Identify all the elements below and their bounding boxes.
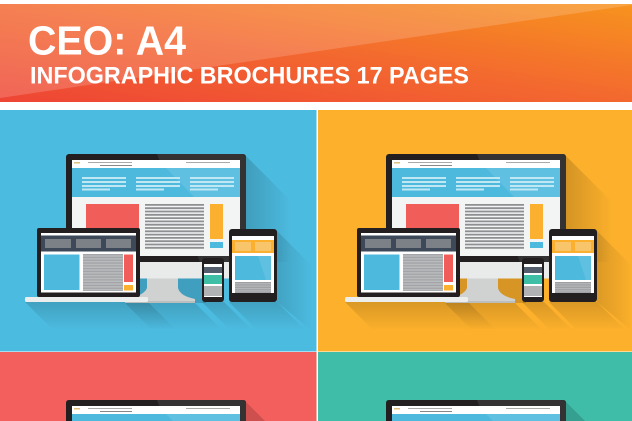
title: CEO: A4 [28, 18, 186, 64]
panel: green background with cropped devices [318, 352, 632, 421]
device mockup: monitor, laptop, tablet, phone on blue [25, 154, 302, 326]
device mockup: monitor top on red [66, 400, 265, 421]
panel: red background with cropped devices [0, 352, 316, 421]
subtitle: INFOGRAPHIC BROCHURES 17 PAGES [30, 62, 469, 90]
panel: orange background with devices [318, 110, 632, 352]
panel: blue background with devices [0, 110, 317, 352]
device mockup: monitor top on green [386, 400, 585, 421]
header banner [0, 4, 632, 102]
device mockup: monitor, laptop, tablet, phone on orange [345, 154, 623, 326]
